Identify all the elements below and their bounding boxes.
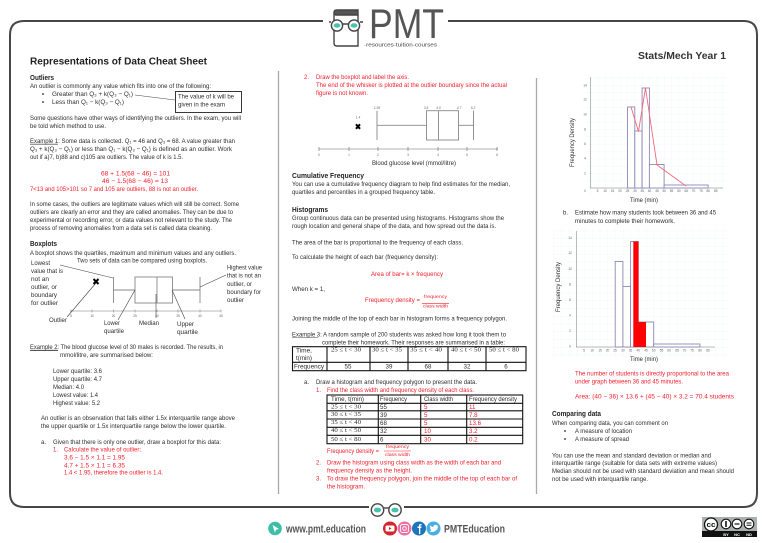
x labels: 60 — [667, 348, 671, 352]
table: class width and frequency density: 5 — [424, 404, 428, 411]
text block: comparing data — [552, 420, 735, 483]
solution step 2 — [304, 74, 507, 97]
text block: other methods: be told which method to use. — [30, 123, 106, 130]
y labels: 12 — [568, 251, 572, 255]
example 1 solution: 46 − 1.5(68 − 46) = 13 — [102, 178, 169, 185]
chart: blood glucose boxplot — [318, 106, 498, 167]
example 2 solution step 1: 4.7 + 1.5 × 1.1 = 6.35 — [64, 462, 126, 470]
bars — [628, 88, 708, 188]
text block: comparing data: When comparing data, you can comment on — [552, 420, 669, 427]
table: survey responses: 68 — [425, 364, 432, 370]
example 3 — [292, 332, 507, 346]
text block: histograms: To calculate the height of each bar (frequency density): — [292, 254, 438, 261]
x labels: 70 — [692, 189, 695, 193]
x labels: 20 — [618, 189, 622, 193]
leader lines — [60, 265, 226, 320]
x labels: 50 — [652, 348, 656, 352]
y labels: 14 — [568, 236, 572, 240]
example 1: Example 1: Some data is collected. Q₁ = 46 and Q₃ = 68. A value greater than — [30, 138, 236, 145]
axis: 5 — [70, 314, 72, 318]
licence badge: CC BY NC ND: BY — [723, 532, 729, 537]
text block: boxplots intro: Two sets of data can be compared using boxplots. — [77, 258, 207, 264]
label: lowest value: not an — [31, 276, 50, 283]
label: lower quartile — [104, 320, 125, 335]
x labels — [597, 189, 718, 193]
solution step 2: The end of the whisker is plotted at the outlier boundary since the actual — [316, 82, 507, 89]
label: upper quartile: Upper — [177, 321, 194, 328]
table: class width and frequency density: 3.2 — [469, 428, 478, 435]
x labels: 75 — [699, 189, 703, 193]
text block: comparing data: not be used with interquartile range. — [552, 476, 648, 483]
answer to question b: The number of students is directly proportional to the area — [575, 370, 730, 378]
axis: 5 — [466, 153, 468, 157]
value labels: 1.95 — [374, 106, 380, 110]
formula: frequency density: class width — [423, 304, 449, 308]
x labels: 70 — [683, 348, 686, 352]
example 2: Example 2: The blood glucose level of 30 males is recorded. The results, in — [30, 344, 224, 351]
example 2: mmol/litre, are summarised below: — [60, 352, 153, 359]
label: highest value: Highest value — [227, 264, 263, 272]
icon: cursor — [268, 522, 282, 535]
formula and steps 2-3: class width — [385, 452, 411, 457]
chart: histogram with frequency polygon — [569, 75, 727, 204]
text block: anomalies: process of removing anomalies from a data set is called data cleaning. — [30, 225, 212, 232]
example 2 solution step 1: Calculate the value of outlier: — [64, 446, 141, 454]
value labels: 4.7 — [457, 106, 461, 110]
text block: histograms — [292, 215, 505, 261]
title: Representations of Data Cheat Sheet — [30, 56, 207, 68]
axis: 6 — [496, 153, 498, 157]
table: class width and frequency density: 25 ≤ t < 30 — [331, 404, 361, 410]
table: survey responses: 50 ≤ t < 80 — [489, 346, 519, 354]
table: survey responses: 39 — [386, 364, 393, 370]
axis: 2 — [377, 153, 379, 157]
label: lower quartile: quartile — [104, 328, 125, 335]
panel: right column — [552, 75, 735, 483]
text block: comparing data: A measure of location — [575, 428, 633, 435]
table: survey responses: 40 ≤ t < 50 — [451, 346, 481, 354]
heading: Histograms: Histograms — [292, 205, 328, 214]
text block: boxplots intro — [30, 250, 236, 264]
x labels: 25 — [626, 189, 629, 193]
text: frequency polygon: Joining the middle of the top of each bar in histogram forms a frequency polygon. — [292, 316, 507, 322]
text block: comparing data: Median should not be used with standard deviation and mean should — [552, 468, 735, 475]
formula: area of bar: Area of bar= k × frequency — [371, 271, 444, 278]
table: class width and frequency density — [327, 395, 523, 444]
text: when k = 1: When k = 1, — [292, 286, 325, 293]
x labels: 35 — [629, 348, 632, 352]
example 1: Q₃ + k(Q₃ − Q₁) or less than Q₁ − k(Q₃ − Q₁) is defined as an outlier. Work — [30, 146, 233, 153]
x labels: 50 — [663, 189, 666, 193]
icon: book — [334, 10, 358, 46]
text block: outlier definition — [30, 83, 211, 106]
y labels: 8 — [584, 128, 586, 132]
example 3: complete their homework. Their responses are summarised in a table: — [322, 340, 505, 346]
x labels: 10 — [590, 348, 594, 352]
footer glasses icon — [371, 504, 401, 516]
table: class width and frequency density: 10 — [424, 428, 431, 435]
table: class width and frequency density: 13.6 — [469, 420, 482, 427]
formula: frequency density — [365, 294, 449, 308]
icon: glasses — [329, 20, 363, 31]
box and whiskers — [377, 111, 474, 140]
icon: youtube — [383, 522, 397, 536]
x labels: 15 — [598, 348, 602, 352]
label: outlier: Outlier — [49, 317, 67, 324]
example 2 solution step 1: 1. — [53, 446, 58, 454]
icon: instagram — [398, 522, 412, 536]
x labels: 10 — [603, 189, 607, 193]
table: class width and frequency density: 32 — [380, 428, 387, 435]
y axis title: Frequency Density — [569, 117, 576, 167]
example 2: Lower quartile: 3.6 — [53, 368, 103, 375]
text block: outlier definition: Less than Q₁ − k(Q₃ − Q₁) — [52, 99, 124, 106]
table: class width and frequency density: 55 — [380, 404, 387, 411]
panel: middle column — [292, 74, 526, 490]
y labels: 4 — [584, 156, 586, 160]
text block: cumulative frequency — [292, 181, 510, 196]
example 2: a. — [41, 439, 46, 446]
label: lowest value: boundary — [31, 292, 58, 299]
text block: anomalies: experimental or recording error, or data values not relevant to the study. The — [30, 217, 233, 224]
y labels: 6 — [569, 298, 571, 302]
example 2 solution step 1: 1.4 < 1.95, therefore the outlier is 1.4. — [64, 470, 163, 476]
table: class width and frequency density: 39 — [380, 412, 387, 419]
y labels: 4 — [569, 314, 571, 318]
x labels: 55 — [660, 348, 663, 352]
text block: histograms: rough location and general shape of the data, and how spread out the data is. — [292, 223, 496, 230]
formula and steps 2-3: frequency — [386, 444, 410, 449]
question a: a. — [304, 379, 309, 386]
text block: outlier definition: An outlier is commonly any value which fits into one of the following: — [30, 83, 211, 90]
formula and steps 2-3: 2. — [316, 460, 321, 466]
question b: Estimate how many students took between 36 and 45 — [575, 210, 717, 216]
heading: Comparing data: Comparing data — [552, 409, 602, 418]
example 2 solution step 1 — [53, 446, 163, 476]
heading: Boxplots: Boxplots — [30, 239, 57, 248]
callout: value of k — [135, 92, 242, 112]
table: class width and frequency density: 0.2 — [469, 436, 478, 444]
licence badge: CC BY NC ND: cc — [706, 522, 716, 529]
axes — [576, 231, 715, 347]
text block: histograms: The area of the bar is proportional to the frequency of each class. — [292, 240, 463, 246]
value labels — [356, 106, 475, 120]
x labels: 15 — [611, 189, 614, 193]
x labels: 40 — [648, 189, 651, 193]
x labels: 30 — [621, 348, 625, 352]
formula and steps 2-3: Draw the histogram using class width as the width of each bar and — [327, 460, 502, 466]
answer to question b: under graph between 36 and 45 minutes. — [575, 378, 683, 386]
y labels — [583, 84, 587, 193]
y labels: 0 — [584, 189, 586, 193]
text block: outlier definition: Greater than Q₃ + k(Q₃ − Q₁) — [52, 91, 133, 98]
bars — [615, 242, 700, 347]
y labels: 6 — [584, 142, 586, 146]
icon: facebook — [412, 522, 426, 536]
formula and steps 2-3: the histogram. — [327, 484, 365, 490]
subject label: Stats/Mech Year 1 — [638, 50, 726, 62]
formula and steps 2-3: frequency density as the height. — [327, 468, 412, 474]
label: highest value: outlier, or — [227, 281, 252, 288]
shaded area — [633, 242, 646, 347]
y labels: 12 — [583, 98, 587, 102]
text block: other methods: Some questions have other ways of identifying the outliers. In the exam, you will — [30, 115, 241, 122]
text block: other methods — [30, 115, 241, 130]
y labels: 14 — [583, 84, 587, 88]
axis: 0 — [318, 153, 320, 157]
y labels: 10 — [583, 112, 587, 116]
text block: anomalies: outliers are clearly an error and they are called anomalies. They can be due to — [30, 209, 234, 216]
example 1 solution: 7<13 and 105>101 so 7 and 105 are outliers, 88 is not an outlier. — [30, 186, 198, 193]
table: class width and frequency density: 7.8 — [469, 412, 478, 419]
x labels: 55 — [670, 189, 673, 193]
x labels: 80 — [707, 189, 710, 193]
table: class width and frequency density: Time, t(min) — [331, 396, 364, 403]
table: class width and frequency density: Frequency — [380, 396, 408, 403]
table: class width and frequency density: 68 — [380, 420, 387, 427]
frequency polygon — [631, 88, 686, 186]
table: class width and frequency density: 5 — [424, 420, 428, 427]
axis: 4 — [437, 153, 439, 157]
label: lowest value: for outlier — [31, 300, 58, 307]
example 1 — [30, 138, 236, 161]
question a: Draw a histogram and frequency polygon to present the data. — [316, 379, 477, 386]
x labels: 5 — [597, 189, 599, 193]
logo: PMT — [329, 0, 444, 48]
callout: value of k: The value of k will be — [178, 94, 235, 100]
text block: boxplots intro: A boxplot shows the quartiles, maximum and minimum values and any outliers. — [30, 250, 236, 257]
example 2: Highest value: 5.2 — [53, 400, 101, 407]
x labels: 30 — [633, 189, 637, 193]
question b: b. — [563, 210, 568, 216]
x axis title: Time (min) — [630, 197, 658, 204]
table: survey responses: 32 — [464, 364, 471, 370]
text block: comparing data: You can use the mean and standard deviation or median and — [552, 452, 712, 460]
question b: minutes to complete their homework. — [575, 218, 675, 225]
axis: 1 — [348, 153, 350, 157]
y labels: 0 — [569, 344, 571, 348]
label: highest value: outlier — [227, 297, 244, 304]
value labels: 4.0 — [436, 106, 441, 110]
x labels: 85 — [714, 189, 718, 193]
table: class width and frequency density: 5 — [424, 412, 428, 419]
value labels: 1.4 — [356, 116, 360, 120]
axis: 35 — [176, 314, 180, 318]
x labels: 35 — [641, 189, 644, 193]
logo tagline: -resources -tuition -courses — [364, 42, 437, 48]
table: survey responses: Time, — [296, 348, 312, 354]
column dividers — [278, 71, 536, 494]
value labels: 3.6 — [424, 106, 428, 110]
table: survey responses: t(min) — [296, 355, 312, 362]
example 2: Median: 4.0 — [53, 384, 85, 391]
x labels: 45 — [644, 348, 648, 352]
x labels: 65 — [685, 189, 688, 193]
step 1 heading: 1. — [316, 387, 321, 394]
x labels: 85 — [706, 348, 710, 352]
panel: left column — [30, 73, 263, 476]
y labels: 8 — [569, 282, 571, 286]
table: survey responses: 25 ≤ t < 30 — [331, 346, 361, 354]
label: lowest value: Lowest — [31, 260, 50, 267]
example 3: Example 3: A random sample of 200 students was asked how long it took them to — [292, 332, 507, 338]
callout: value of k: given in the exam — [178, 102, 225, 108]
label: highest value: boundary for — [227, 289, 261, 296]
chart: labelled boxplot — [31, 260, 263, 336]
formula and steps 2-3: 3. — [316, 476, 321, 482]
x labels: 80 — [698, 348, 702, 352]
y labels: 2 — [569, 329, 571, 333]
label: median: Median — [139, 320, 160, 327]
table: class width and frequency density: 6 — [380, 436, 384, 444]
table: class width and frequency density: 30 ≤ t < 35 — [331, 411, 361, 418]
heading: Cumulative Frequency: Cumulative Frequency — [292, 171, 365, 180]
social handle: PMTEducation — [444, 524, 505, 536]
value labels: 5.2 — [471, 106, 475, 110]
label: lowest value: outlier, or — [31, 284, 57, 291]
x labels: 65 — [675, 348, 679, 352]
example 1 solution — [30, 170, 198, 193]
x labels: 25 — [613, 348, 617, 352]
text block: cumulative frequency: You can use a cumulative frequency diagram to help find estimates for the median, — [292, 181, 510, 188]
text block: anomalies — [30, 201, 240, 232]
heading: Outliers: Outliers — [30, 73, 54, 82]
solution step 2: Draw the boxplot and label the axis. — [316, 74, 409, 81]
x labels: 40 — [637, 348, 640, 352]
x labels: 60 — [677, 189, 681, 193]
solution step 2: figure is not known. — [316, 90, 368, 97]
answer to question b — [575, 370, 734, 400]
footer social — [383, 522, 505, 536]
solution step 2: 2. — [304, 74, 309, 81]
axis title: Blood glucose level (mmol/litre) — [372, 160, 456, 167]
axis: 10 — [90, 314, 94, 318]
text block: comparing data: A measure of spread — [575, 436, 630, 443]
table: class width and frequency density: 40 ≤ t < 50 — [331, 427, 361, 434]
website text: www.pmt.education — [285, 524, 366, 536]
label: upper quartile — [177, 321, 199, 336]
table: class width and frequency density: Class width — [424, 396, 454, 403]
table: class width and frequency density: Frequency density — [469, 396, 518, 403]
y labels: 10 — [568, 267, 572, 271]
x labels — [583, 348, 710, 352]
label: lowest value: value that is — [31, 268, 63, 275]
table: class width and frequency density: 50 ≤ t < 80 — [331, 436, 361, 443]
x labels: 20 — [606, 348, 609, 352]
example 2 — [30, 344, 236, 446]
licence badge: CC BY NC ND: NC — [734, 532, 740, 537]
label: highest value — [227, 264, 263, 304]
icon: twitter — [426, 522, 440, 536]
example 2: An outlier is an observation that falls either 1.5x interquartile range above — [41, 415, 236, 422]
x labels: 75 — [690, 348, 694, 352]
text block: comparing data: interquartile range (suitable for data sets with extreme values) — [552, 460, 717, 467]
table: class width and frequency density: 11 — [469, 404, 476, 411]
table: survey responses: 35 ≤ t < 40 — [410, 346, 442, 354]
axis: 20 — [112, 314, 115, 318]
x labels: 45 — [655, 189, 659, 193]
step 1 heading: Find the class width and frequency density of each class. — [327, 387, 474, 394]
table: survey responses: 30 ≤ t < 35 — [372, 346, 402, 354]
example 2: Lowest value: 1.4 — [53, 392, 99, 399]
axis: 45 — [219, 314, 223, 318]
example 2: the upper quartile or 1.5x interquartile range below the lower quartile. — [41, 423, 226, 430]
label: highest value: that is not an — [227, 272, 262, 280]
logo wordmark: PMT — [369, 0, 444, 47]
formula: frequency density: Frequency density = — [365, 297, 420, 304]
text block: anomalies: In some cases, the outliers are legitimate values which will still be correct. Some — [30, 201, 240, 208]
formula and steps 2-3: To draw the frequency polygon, join the middle of the top of each bar of — [327, 476, 517, 482]
label: upper quartile: quartile — [177, 329, 199, 336]
axis: 40 — [198, 314, 202, 318]
table: class width and frequency density: 35 ≤ t < 40 — [331, 419, 361, 426]
chart: shaded histogram — [553, 229, 728, 363]
axes — [590, 77, 723, 188]
answer to question b: Area: (40 − 36) × 13.6 + (45 − 40) × 3.2 = 70.4 students — [575, 394, 734, 400]
formula and steps 2-3 — [316, 444, 517, 490]
x labels: 5 — [583, 348, 585, 352]
axis: 30 — [155, 314, 159, 318]
y labels — [568, 236, 572, 348]
text block: histograms: Group continuous data can be presented using histograms. Histograms show the — [292, 215, 505, 222]
footer website — [268, 522, 366, 536]
x axis title: Time (min) — [630, 356, 658, 363]
label: lower quartile: Lower — [104, 320, 120, 327]
example 1 solution: 68 + 1.5(68 − 46) = 101 — [101, 170, 171, 178]
text block: cumulative frequency: quartiles and percentiles in a grouped frequency table. — [292, 189, 435, 196]
y axis title: Frequency Density — [555, 261, 562, 312]
table: survey responses: 55 — [345, 364, 352, 370]
licence badge: CC BY NC ND: ND — [746, 532, 752, 537]
outlier marker — [94, 279, 98, 284]
formula: frequency density: frequency — [424, 294, 448, 299]
label: lowest value — [31, 260, 63, 307]
axis: 25 — [133, 314, 137, 318]
axis — [318, 147, 498, 157]
boxplot shape — [114, 277, 200, 303]
question b — [563, 210, 717, 225]
table: class width and frequency density: 30 — [424, 436, 431, 444]
table: survey responses: 6 — [504, 364, 508, 370]
table: survey responses: Frequency — [294, 364, 325, 370]
example 1: out if a)7, b)88 and c)105 are outliers. The value of k is 1.5. — [30, 154, 183, 161]
axis: 3 — [407, 153, 409, 157]
outlier marker — [356, 124, 360, 129]
y labels: 2 — [584, 172, 586, 176]
axis — [70, 310, 223, 318]
example 2 solution step 1: 3.6 − 1.5 × 1.1 = 1.95 — [64, 454, 126, 462]
formula and steps 2-3: Frequency density = — [327, 448, 379, 455]
example 2: Upper quartile: 4.7 — [53, 376, 103, 383]
table: survey responses — [292, 346, 526, 371]
example 2: Given that there is only one outlier, draw a boxplot for this data: — [53, 439, 221, 446]
licence badge: CC BY NC ND — [702, 517, 757, 537]
